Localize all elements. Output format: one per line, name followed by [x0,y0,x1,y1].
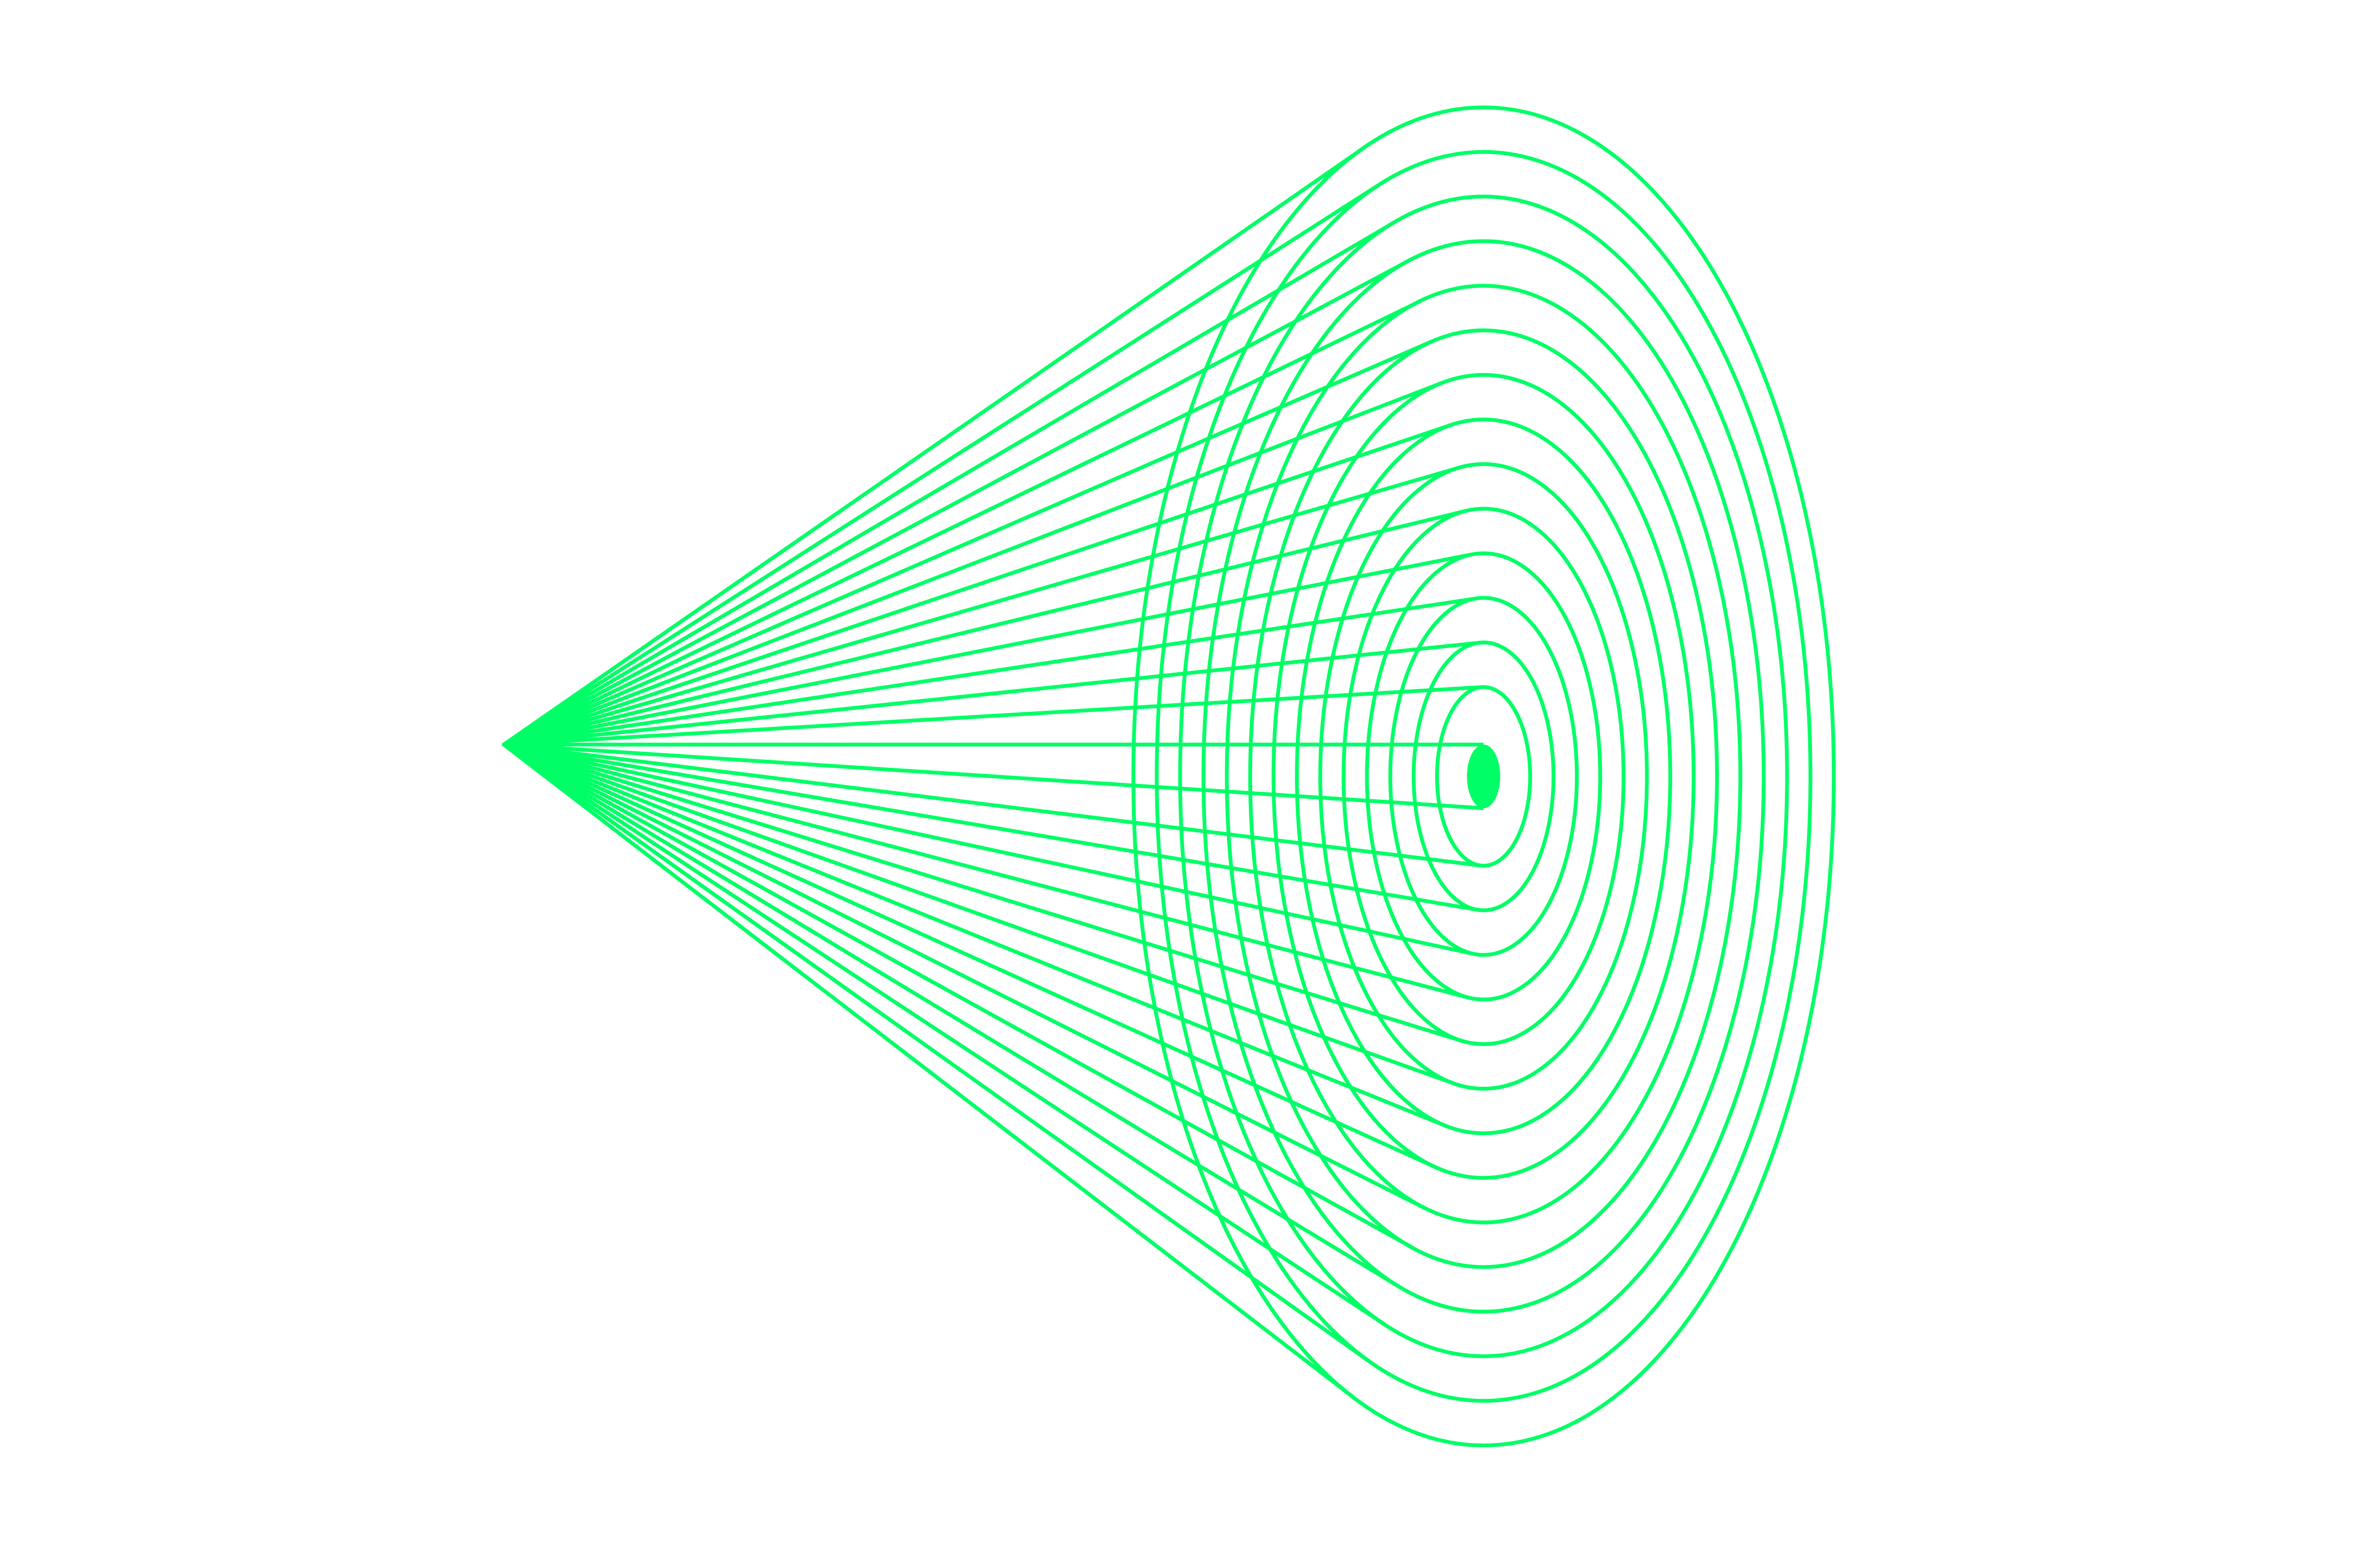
ring 14 (outermost) [504,107,1834,1445]
ring 1 (innermost outline) [504,687,1530,866]
ring 7 [504,420,1670,1133]
ring 10 [504,286,1740,1267]
ring 8 [504,375,1694,1178]
ring 11 [504,241,1764,1311]
ring 4 [504,553,1600,1000]
ring 3 [504,598,1577,955]
solid core ellipse with its two lines [504,745,1500,808]
ring 9 [504,330,1717,1223]
ring 5 [504,509,1624,1044]
ring 2 [504,642,1553,910]
wireframe layers [504,107,1834,1445]
ring 6 [504,464,1647,1089]
ring 13 [504,152,1811,1401]
ring 12 [504,197,1787,1356]
